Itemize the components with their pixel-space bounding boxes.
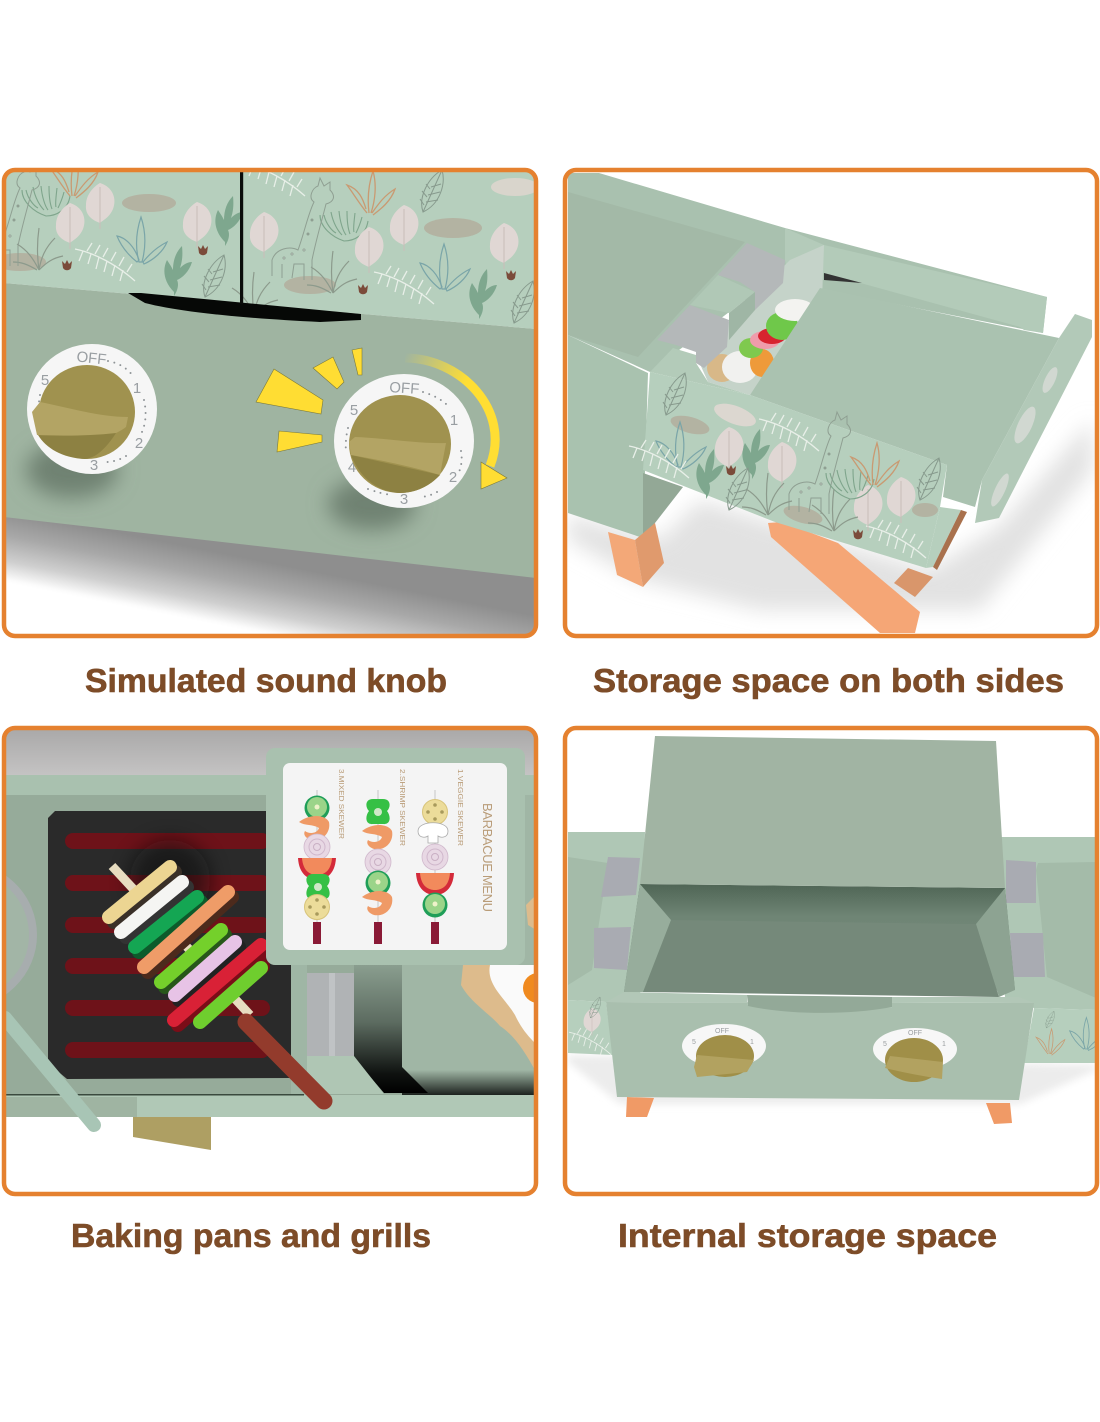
knob right: 1 xyxy=(450,412,458,429)
left leg xyxy=(608,523,664,587)
floor shadow xyxy=(568,420,1092,610)
dark gap xyxy=(354,965,428,1093)
grey hinges xyxy=(594,857,1045,977)
skewer 3 mixed xyxy=(298,790,336,944)
knob left: OFF xyxy=(715,1028,729,1035)
grey background strip xyxy=(4,728,536,775)
knob right xyxy=(873,1028,957,1082)
menu title: BARBACUE MENU xyxy=(480,803,495,912)
caption: storage space on both sides: Storage space on both sides xyxy=(593,662,1064,699)
top green rim xyxy=(4,775,536,795)
knob left: 3 xyxy=(90,457,98,474)
orange border xyxy=(565,728,1097,1194)
caption: internal storage space: Internal storage space xyxy=(618,1217,997,1254)
skewer on grill xyxy=(109,840,324,1101)
yellow rotation arrow xyxy=(405,358,507,489)
menu column labels xyxy=(337,769,465,847)
red grill bars xyxy=(65,833,270,1058)
left rim and back rim xyxy=(568,173,1047,372)
raised lid xyxy=(640,736,1005,888)
pan ring xyxy=(6,876,37,994)
knob left: 5 xyxy=(41,372,49,389)
knob left: 1 xyxy=(133,380,141,397)
grey hinge xyxy=(307,973,354,1056)
panel: simulated sound knob xyxy=(0,154,539,636)
sliding drawer plate xyxy=(750,288,1059,507)
menu column labels: 2.SHRIMP SKEWER xyxy=(398,769,407,847)
barbecue menu board xyxy=(266,748,525,965)
light wedge under hinge xyxy=(307,1056,384,1094)
knob left: 1 xyxy=(750,1039,754,1046)
skewer 2 shrimp xyxy=(362,790,392,944)
knob left: OFF xyxy=(76,349,107,369)
bottom rim xyxy=(4,1094,536,1117)
orange folded board xyxy=(768,522,920,633)
legs xyxy=(626,1097,1012,1124)
right arm xyxy=(1001,837,1100,1063)
left body front xyxy=(568,335,648,538)
printed front rim xyxy=(650,348,750,395)
menu column labels: 1.VEGGIE SKEWER xyxy=(456,769,465,847)
knob right: OFF xyxy=(908,1030,922,1037)
knob right: 4 xyxy=(348,459,356,476)
drawer right wall xyxy=(975,314,1092,523)
pull notch xyxy=(747,995,892,1013)
stored play food xyxy=(707,299,815,383)
wooden stick xyxy=(112,866,250,1015)
front panel xyxy=(606,1002,1034,1100)
menu column labels: 3.MIXED SKEWER xyxy=(337,769,346,840)
printed jungle door band xyxy=(6,172,534,329)
knob left: 5 xyxy=(692,1039,696,1046)
knob right: OFF xyxy=(389,379,420,398)
panel: baking pans and grills xyxy=(0,728,553,1194)
caption: baking pans and grills: Baking pans and grills xyxy=(71,1217,431,1254)
right tray xyxy=(402,795,536,1095)
grill cavity xyxy=(4,795,402,1095)
left storage tray xyxy=(568,335,569,336)
yellow sound burst marks xyxy=(256,348,362,452)
floor shadow xyxy=(4,510,536,636)
underside of body xyxy=(643,473,683,538)
knob right: 5 xyxy=(350,402,358,419)
wood board with fried egg xyxy=(461,895,553,1072)
black slot and door gap xyxy=(128,170,361,322)
panel: internal storage space xyxy=(565,728,1100,1194)
knob left: 2 xyxy=(135,435,143,452)
panel: storage space on both sides xyxy=(565,170,1097,636)
left arm xyxy=(568,832,645,1055)
printed jungle drawer face xyxy=(629,372,947,568)
black grill plate xyxy=(48,811,291,1079)
knob right: 5 xyxy=(883,1041,887,1048)
compartment interior xyxy=(696,245,824,395)
food slices xyxy=(109,867,265,1025)
orange border xyxy=(4,728,536,1194)
knob left xyxy=(682,1024,766,1077)
skewer 1 veggie xyxy=(416,790,454,944)
grey hinges xyxy=(657,243,785,368)
red handle xyxy=(246,1022,324,1101)
drawer side strip xyxy=(926,507,967,570)
right rear leg xyxy=(894,568,933,597)
pan handle xyxy=(5,1018,94,1125)
green front panel xyxy=(4,283,536,578)
interior back wall xyxy=(624,884,1015,992)
orange border xyxy=(4,170,536,636)
orange border xyxy=(565,170,1097,636)
wall print marks xyxy=(991,367,1058,506)
soft floor shadow xyxy=(568,1055,1096,1104)
caption: simulated sound knob: Simulated sound knob xyxy=(85,662,447,699)
interior floor xyxy=(643,920,999,997)
knob right: 1 xyxy=(942,1041,946,1048)
gold knob underside xyxy=(133,1117,211,1150)
light wall right of grill xyxy=(291,965,307,1095)
interior side walls xyxy=(624,884,1015,997)
knob right xyxy=(328,374,474,530)
knob right: 2 xyxy=(449,469,457,486)
top rim xyxy=(606,992,1034,1008)
knob left xyxy=(26,344,157,498)
knob right: 3 xyxy=(400,491,408,508)
